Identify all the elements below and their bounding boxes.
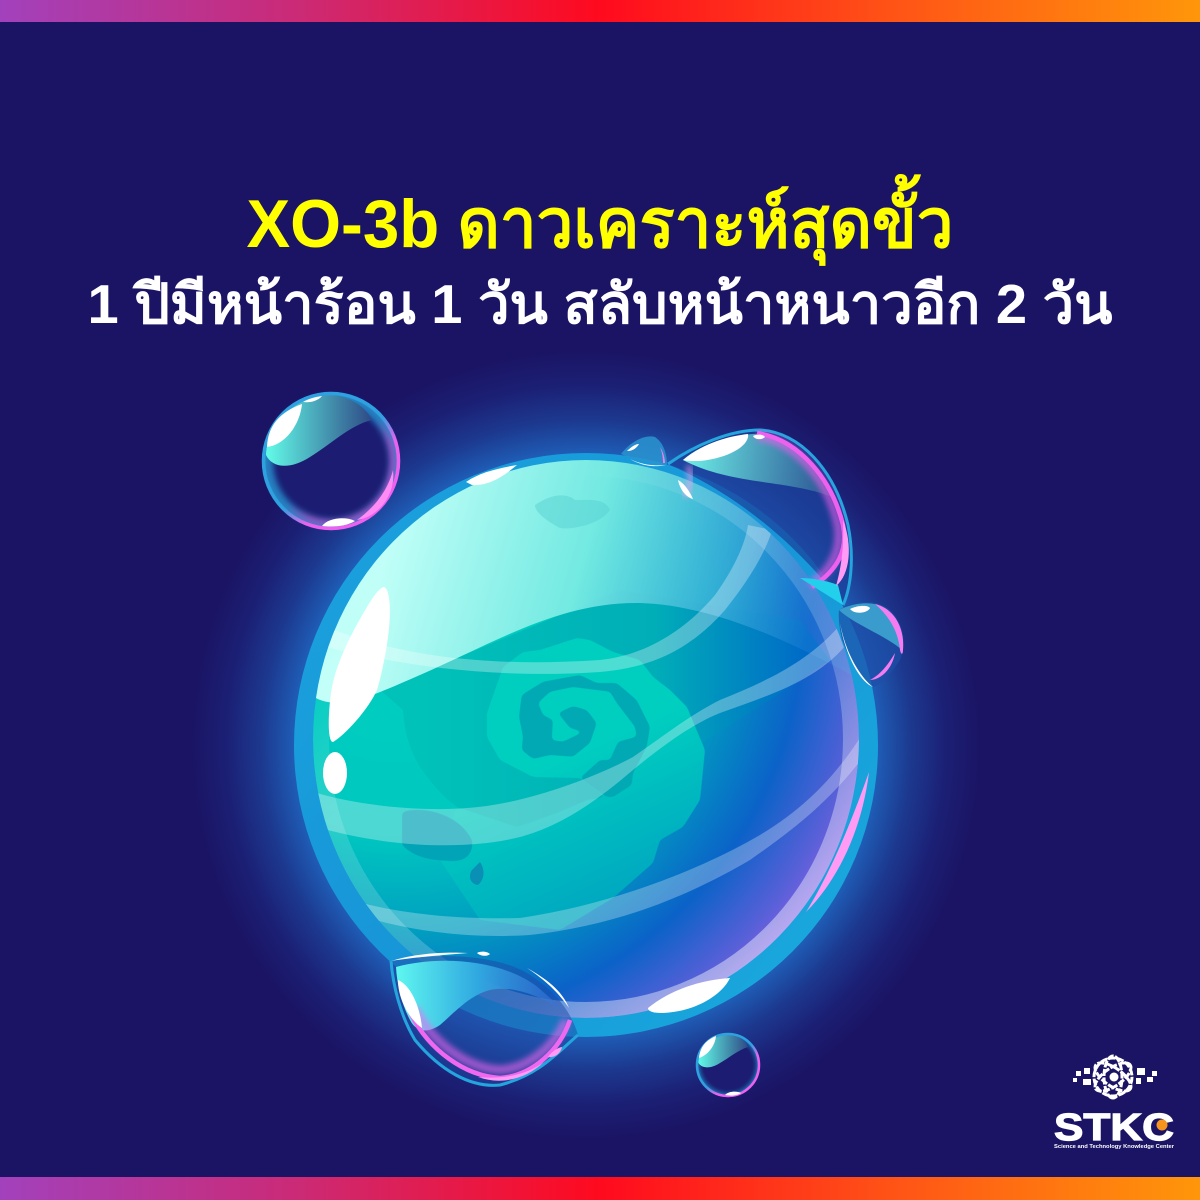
cloud band upper [300,525,772,674]
highlight: right pink [806,772,869,912]
pink lens [357,470,393,520]
bubble shine [698,1034,748,1067]
droplet outline [391,961,578,1085]
title: XO-3b ดาวเคราะห์สุดขั้ว [246,173,954,266]
highlight: top [466,465,517,485]
droplet: bottom left [391,952,578,1085]
droplet pink glint [478,1047,562,1081]
droplet: top small [621,436,667,466]
planet outer shell [294,453,878,1037]
logo tagline: Science and Technology Knowledge Center [1054,1144,1175,1150]
droplet body [668,430,851,605]
droplet outer rim [668,430,851,605]
spiral arm [519,675,650,797]
droplet: top right [668,430,851,605]
bubble rim [697,1034,759,1096]
subtitle: 1 ปีมีหน้าร้อน 1 วัน สลับหน้าหนาวอีก 2 วัน [88,273,1113,335]
top gradient bar [0,0,1200,22]
pale cap patch [535,495,610,528]
droplet glints [627,444,666,466]
droplet pink cross [684,466,691,497]
gloss cap [316,460,852,702]
droplet pink edge [660,447,665,463]
cloud band lower [366,740,859,936]
droplet shine [396,961,566,1030]
logo wordmark: STKC [1054,1107,1174,1149]
logo orange dot [1156,1120,1168,1130]
logo atom icon [1091,1056,1135,1098]
cloud band middle [295,625,850,845]
storm blob [440,638,705,930]
small storm patch [402,810,472,861]
bottom gradient bar [0,1177,1200,1200]
white glints [678,434,765,499]
planet [290,400,880,1037]
bubble: top left [262,392,400,530]
droplet pink glow [415,1008,566,1070]
droplet pink glow [757,436,839,585]
bubble inner glow [269,399,393,523]
droplet shine [683,434,832,497]
droplet pink edge [757,433,844,587]
logo pixels [1073,1068,1157,1085]
highlight: small oval [323,752,347,794]
droplet: right [839,602,903,687]
inner rim ring [321,468,851,1010]
highlight: bottom [648,978,730,1013]
droplet body [391,956,578,1085]
planet glow [191,350,981,1140]
logo nucleus [1110,1072,1118,1082]
pink glint [836,520,849,586]
droplet glints [391,952,569,1028]
droplet pink edge [410,1012,570,1078]
droplet pink edge [870,604,903,680]
white glints [699,1036,741,1096]
planet surface [313,460,859,1018]
droplet shine [839,603,902,650]
bubble shine [266,395,372,466]
bubble: bottom small [696,1033,760,1097]
cloud drop [470,862,484,885]
droplet white edge [840,606,873,687]
highlight: big lens [329,587,390,742]
logo: STKC [1054,1056,1175,1150]
white glints [267,396,355,526]
droplet rim overlap [800,578,843,605]
darker cloud zone [382,603,830,814]
bubble rim [264,394,398,528]
